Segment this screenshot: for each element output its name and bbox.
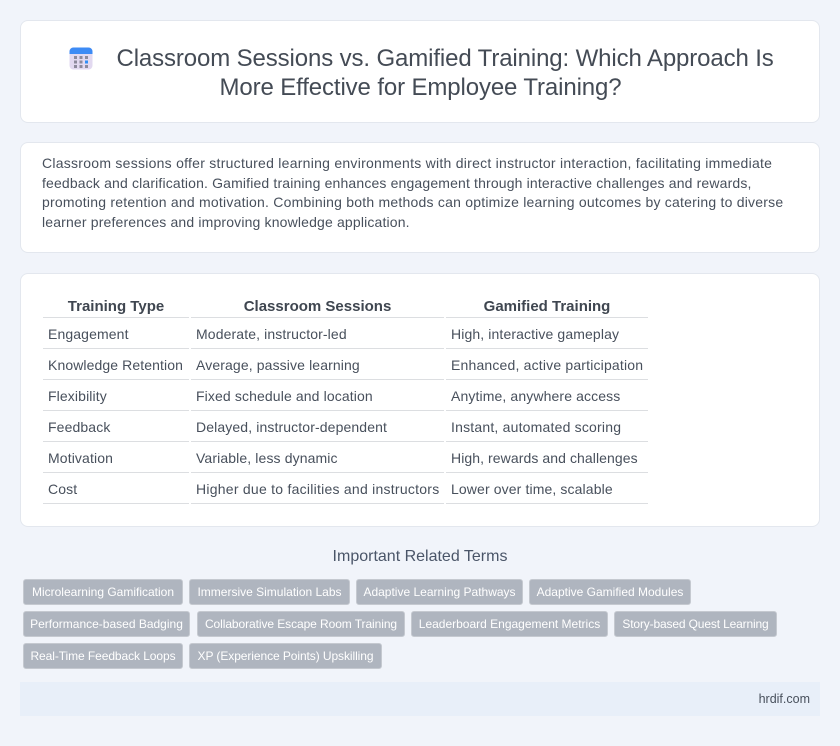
summary paragraph: feedback and clarification. Gamified training enhances engagement through interactive challenges and rewards, [42,174,752,190]
panel: summary text [20,142,820,253]
row: flexibility: Flexibility [48,388,107,404]
footer source: hrdif.com [759,692,810,706]
header row [68,298,610,315]
panel: title card [20,20,820,123]
row: feedback: Instant, automated scoring [451,419,621,435]
row: engagement: Engagement [48,326,129,342]
row: feedback [48,419,621,435]
related terms heading: Important Related Terms [333,548,507,565]
row: cost: Cost [48,481,77,497]
row: knowledge retention [48,357,643,373]
row: knowledge retention: Average, passive learning [196,357,360,373]
footer bar [20,682,820,716]
tag [529,579,691,605]
tag: Collaborative Escape Room Training [205,617,397,631]
header row: Training Type [68,298,164,315]
tag [356,579,523,605]
tag: Performance-based Badging [30,617,183,631]
row: knowledge retention: Enhanced, active participation [451,357,643,373]
row: motivation: Variable, less dynamic [196,450,338,466]
tag: Adaptive Learning Pathways [363,585,516,599]
row: flexibility: Anytime, anywhere access [451,388,620,404]
summary paragraph [42,155,783,230]
icon: calendar [70,48,92,70]
row: motivation [48,450,638,466]
title: More Effective for Employee Training? [220,74,621,101]
tag [23,611,190,637]
row: engagement [48,326,619,342]
header row: Gamified Training [484,298,610,315]
tag: Leaderboard Engagement Metrics [419,617,600,631]
row: flexibility: Fixed schedule and location [196,388,373,404]
row: knowledge retention: Knowledge Retention [48,357,183,373]
tag [23,579,183,605]
panel: comparison table [20,273,820,527]
summary paragraph: Classroom sessions offer structured learning environments with direct instructor interaction, facilitating immediate [42,155,772,171]
row: motivation: Motivation [48,450,113,466]
tag [197,611,405,637]
tag: Story-based Quest Learning [622,617,769,631]
tag [189,643,382,669]
summary paragraph: promoting retention and motivation. Combining both methods can optimize learning outcomes by catering to diverse [42,194,783,210]
header row: Classroom Sessions [244,298,391,315]
tag [614,611,777,637]
tag: XP (Experience Points) Upskilling [198,649,373,663]
row: cost: Higher due to facilities and instructors [196,481,439,497]
tag: Real-Time Feedback Loops [30,649,176,663]
row: engagement: High, interactive gameplay [451,326,619,342]
tag [411,611,608,637]
row: feedback: Delayed, instructor-dependent [196,419,387,435]
tag: Microlearning Gamification [32,585,174,599]
row: engagement: Moderate, instructor-led [196,326,347,342]
title: Classroom Sessions vs. Gamified Training: Which Approach Is [116,45,774,72]
tag: Immersive Simulation Labs [197,585,342,599]
table [43,298,648,504]
row: flexibility [48,388,620,404]
tag [189,579,350,605]
tag [23,643,183,669]
row: cost: Lower over time, scalable [451,481,613,497]
tag list [23,579,777,669]
row: feedback: Feedback [48,419,110,435]
row: motivation: High, rewards and challenges [451,450,638,466]
summary paragraph: learner preferences and improving knowledge application. [42,214,410,230]
tag: Adaptive Gamified Modules [537,585,683,599]
title [116,45,774,101]
row: cost [48,481,613,497]
